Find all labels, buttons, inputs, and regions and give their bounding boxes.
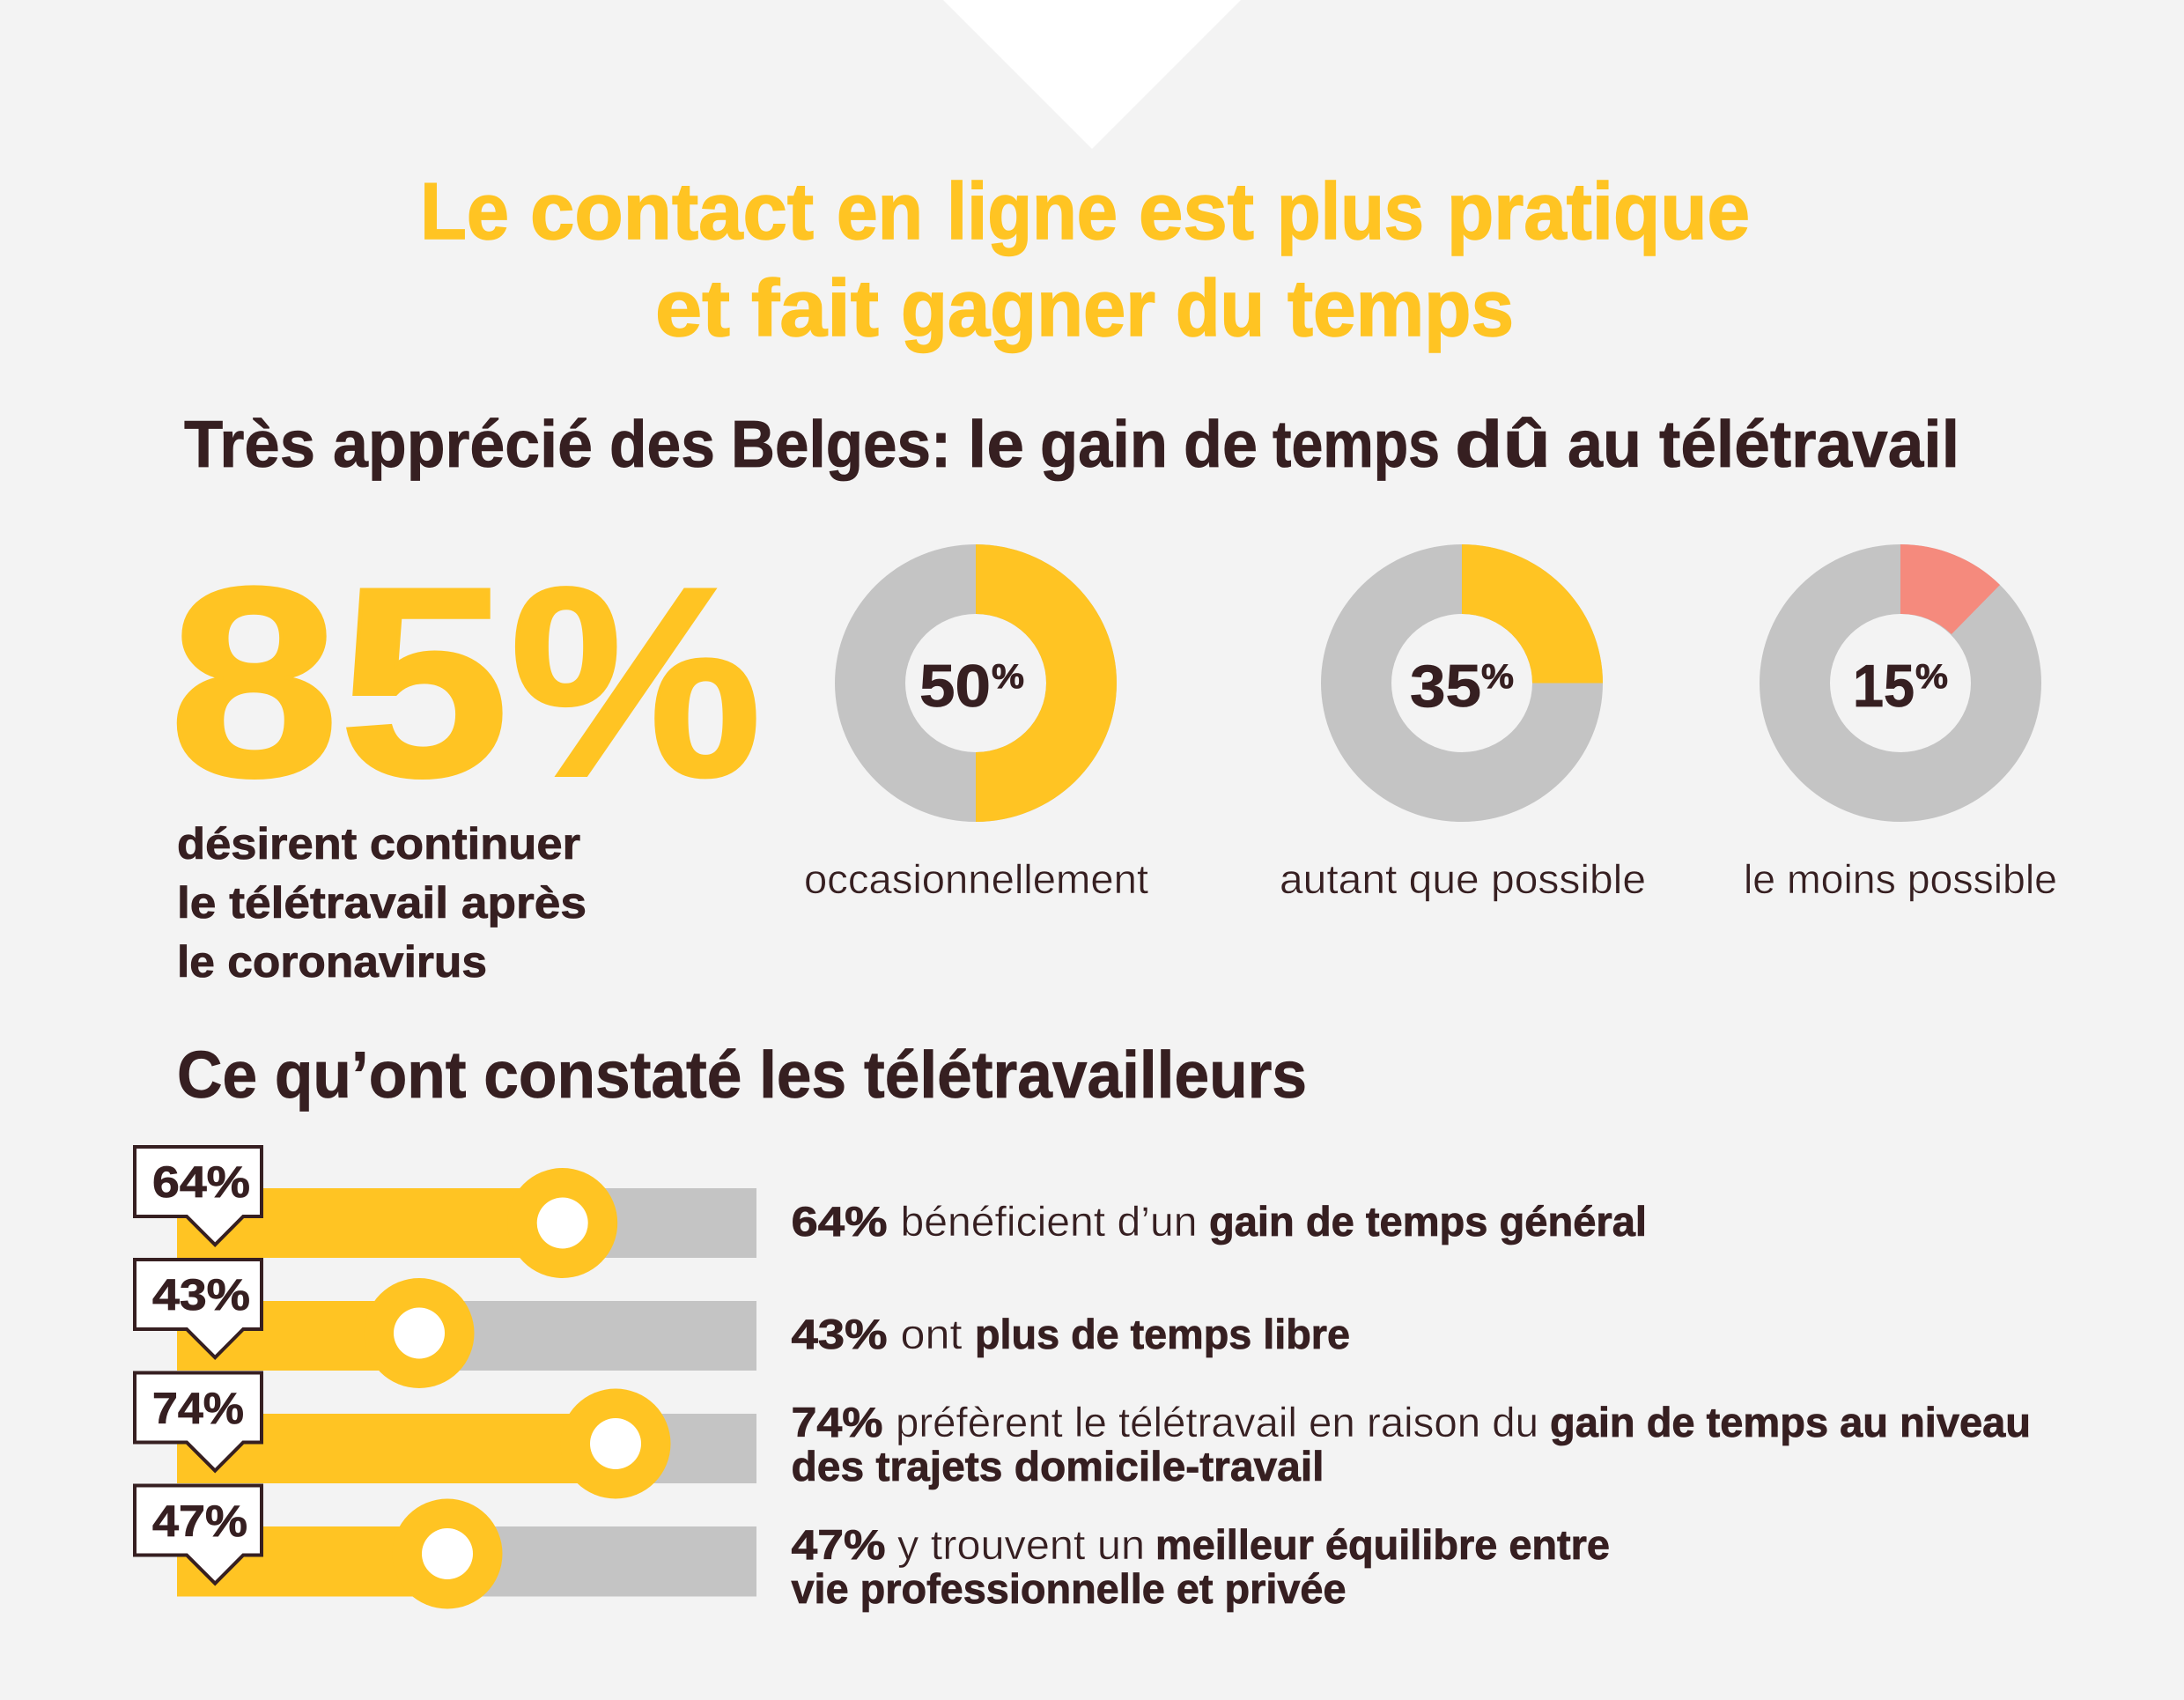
title: [420, 167, 1750, 353]
heading: gain de temps: apprécié: [333, 407, 593, 481]
row text: 47%: 47%: [791, 1521, 886, 1568]
donut chart: 50% occasionnellement: occasionnellement: [804, 856, 1148, 902]
bar row: 74%: [177, 1388, 756, 1499]
heading: gain de temps: télétravail: [1659, 407, 1959, 481]
callout: 64%: 64%: [152, 1157, 250, 1207]
heading: gain de temps: dû: [1455, 407, 1551, 481]
donut chart: 35% autant que possible: [1280, 544, 1646, 902]
callout: 43%: [135, 1260, 262, 1357]
bar row: 47%: [177, 1499, 756, 1608]
big stat 85%: 85: [169, 531, 509, 832]
callout: 47%: 47%: [152, 1497, 247, 1546]
title: pratique: [1447, 167, 1750, 256]
heading: gain de temps: [184, 407, 1959, 481]
row text: 64%: gain de temps général: [1209, 1198, 1647, 1245]
stat caption: [177, 819, 587, 987]
callout: 74%: [135, 1372, 262, 1471]
title: et: [655, 264, 730, 353]
row text: 43%: ont: [900, 1311, 962, 1357]
heading: gain de temps: au: [1568, 407, 1642, 481]
title: contact: [530, 167, 814, 256]
stat caption: le coronavirus: [177, 937, 487, 987]
callout: 64%: [135, 1147, 262, 1245]
title: du: [1176, 264, 1265, 353]
row text: 64%: [791, 1198, 1647, 1245]
heading: constaté: Ce qu’ont constaté les télétravailleurs: [177, 1038, 1307, 1112]
title: temps: [1288, 264, 1514, 353]
title: en: [837, 167, 923, 256]
donut chart: 50% occasionnellement: 50: [919, 653, 991, 720]
row text: 74%: 74%: [791, 1399, 882, 1445]
callout: 47%: [135, 1485, 262, 1584]
heading: gain de temps: des: [609, 407, 715, 481]
row text: 47%: vie professionnelle et privée: [791, 1565, 1346, 1612]
donut chart: 15% le moins possible: 15: [1853, 653, 1915, 720]
row text: 47%: y trouvent un: [897, 1521, 1145, 1568]
donut chart: 15% le moins possible: [1744, 544, 2057, 902]
big stat 85%: %: [510, 531, 762, 832]
row text: 74%: des trajets domicile-travail: [791, 1443, 1324, 1489]
heading: gain de temps: temps: [1273, 407, 1440, 481]
row text: 43%: plus de temps libre: [975, 1311, 1350, 1357]
donut chart: 35% autant que possible: 35: [1410, 653, 1481, 720]
bar row: 64%: [177, 1168, 756, 1278]
title: est: [1139, 167, 1254, 256]
heading: gain de temps: gain: [1040, 407, 1168, 481]
title: fait: [751, 264, 879, 353]
donut chart: 35% autant que possible: autant que possible: [1280, 856, 1646, 902]
row text: 43%: [791, 1311, 1350, 1357]
callout: 74%: 74%: [152, 1384, 244, 1433]
row text: 64%: bénéficient d’un: [900, 1198, 1198, 1245]
stat caption: désirent continuer: [177, 819, 580, 868]
donut chart: 35% autant que possible: %: [1481, 658, 1514, 696]
heading: gain de temps: Très: [184, 407, 315, 481]
title: plus: [1277, 167, 1424, 256]
stat caption: le télétravail après: [177, 878, 587, 928]
donut chart: 50% occasionnellement: [804, 544, 1148, 902]
row text: 47%: [791, 1521, 1610, 1612]
donut chart: 15% le moins possible: %: [1915, 658, 1948, 696]
title: gagner: [901, 264, 1155, 353]
row text: 74%: [791, 1399, 2031, 1489]
callout: 43%: 43%: [152, 1270, 250, 1319]
row text: 47%: meilleur équilibre entre: [1155, 1521, 1610, 1568]
donut chart: 15% le moins possible: le moins possible: [1744, 856, 2057, 902]
donut chart: 50% occasionnellement: %: [992, 658, 1024, 696]
title: Le: [420, 167, 509, 256]
row text: 74%: préfèrent le télétravail en raison du: [896, 1399, 1538, 1445]
row text: 74%: gain de temps au niveau: [1550, 1399, 2031, 1445]
row text: 43%: 43%: [791, 1311, 888, 1357]
heading: gain de temps: Belges:: [731, 407, 951, 481]
big stat 85%: [169, 531, 762, 832]
bar row: 43%: [177, 1278, 756, 1388]
row text: 64%: 64%: [791, 1198, 888, 1245]
heading: gain de temps: le: [968, 407, 1024, 481]
heading: gain de temps: de: [1184, 407, 1258, 481]
title: ligne: [947, 167, 1118, 256]
top white triangle: [943, 0, 1241, 149]
